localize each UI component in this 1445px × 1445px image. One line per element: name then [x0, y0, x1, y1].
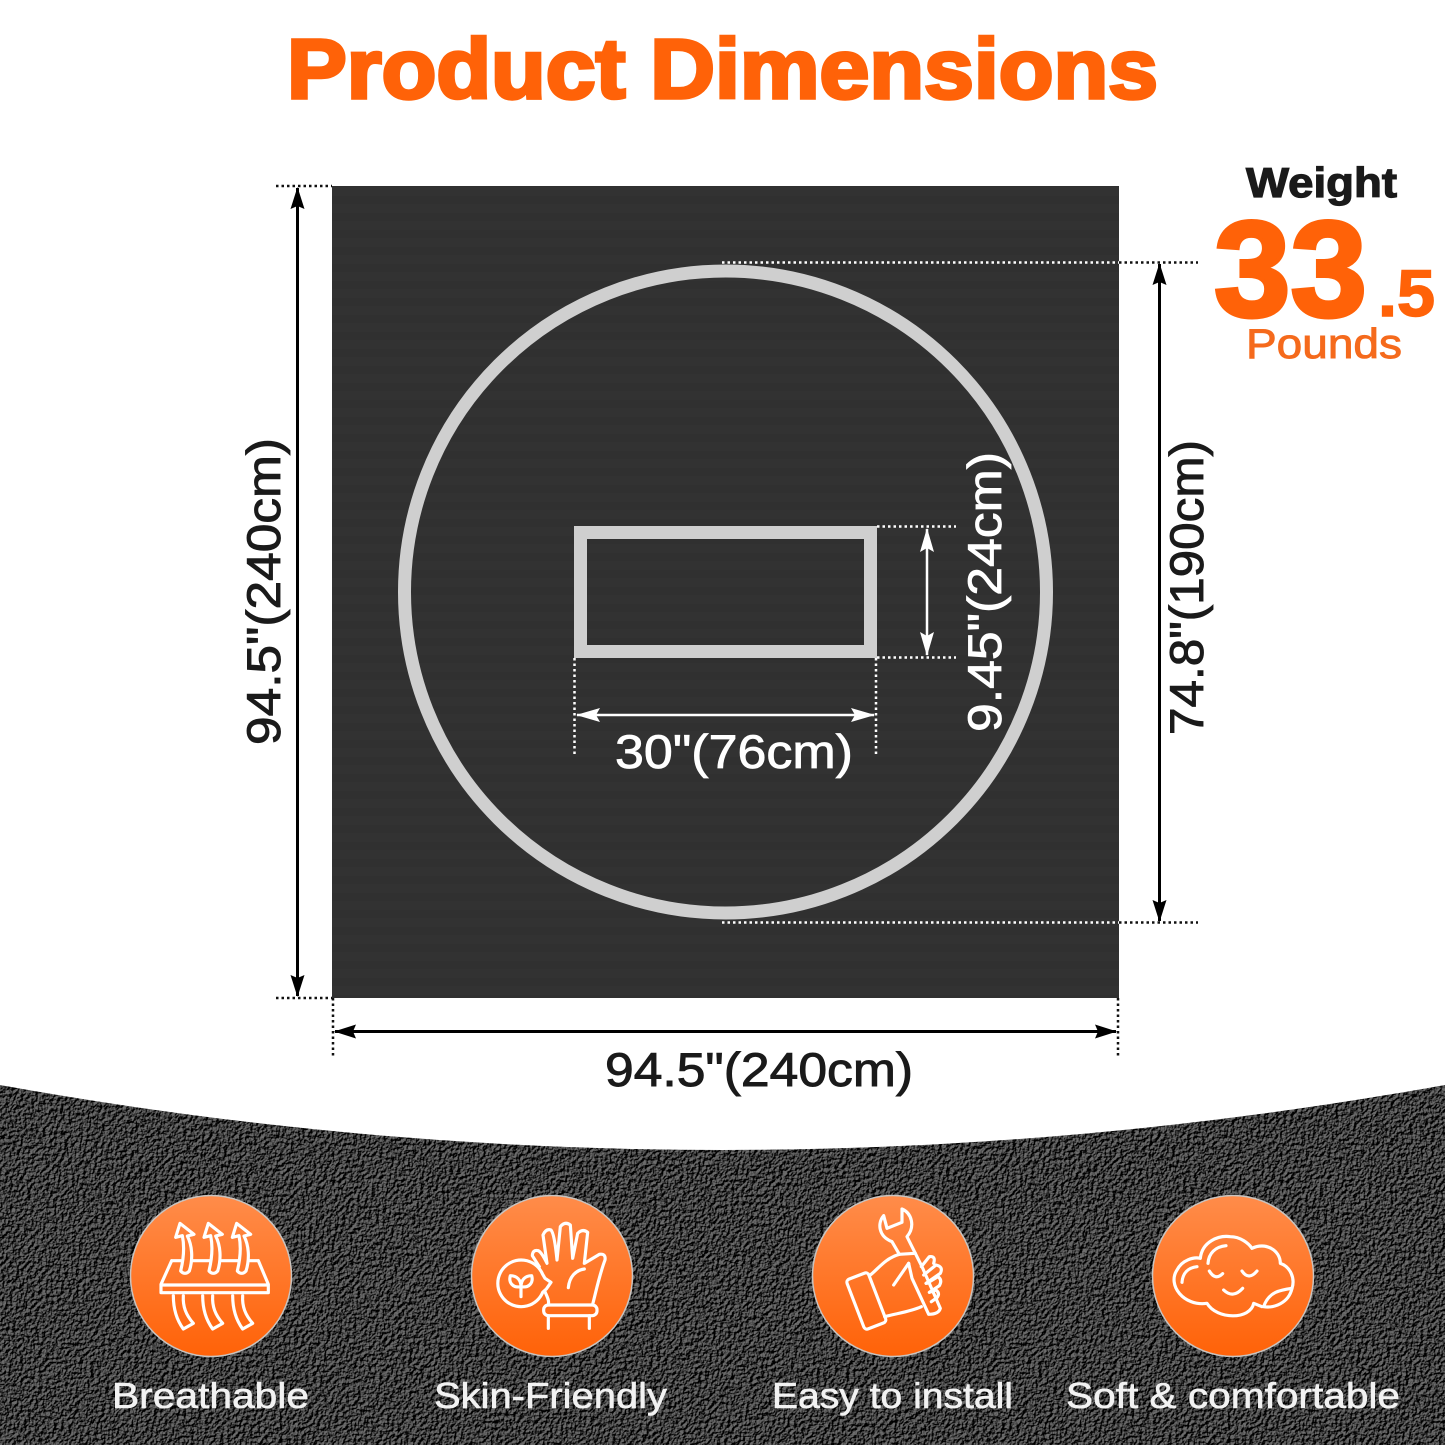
- label: soft and comfortable: Soft & comfortable: [1066, 1375, 1400, 1416]
- panel: leather feature band: [0, 1080, 1445, 1445]
- dimension: rectangle height: 9.45"(24cm): [958, 452, 1011, 732]
- label: breathable: Breathable: [112, 1375, 309, 1416]
- title: Product Dimensions: [287, 22, 1158, 116]
- feature: breathable: [112, 1196, 309, 1416]
- large circle marking: [404, 271, 1046, 913]
- dimension: rectangle width: 30"(76cm): [615, 725, 853, 778]
- panel: mat diagram: [332, 186, 1119, 998]
- dimension: mat width: [333, 998, 1118, 1096]
- feature: easy to install: [772, 1196, 1013, 1416]
- weight value: 33: [1214, 193, 1367, 345]
- dimension: mat height: [237, 186, 332, 998]
- dimension: circle diameter: 74.8"(190cm): [1160, 440, 1213, 735]
- label: easy to install: Easy to install: [772, 1375, 1013, 1416]
- label: skin-friendly: Skin-Friendly: [434, 1375, 667, 1416]
- icon: glove with leaf: [498, 1223, 605, 1328]
- weight callout: [1214, 159, 1435, 367]
- dimension: rectangle width: [574, 658, 876, 778]
- weight decimal: .5: [1378, 256, 1435, 330]
- icon: smiling cloud: [1174, 1236, 1293, 1316]
- feature: skin-friendly: [434, 1196, 667, 1416]
- mat surface: [332, 186, 1119, 998]
- dimension: mat width: 94.5"(240cm): [605, 1043, 913, 1096]
- weight label: Weight: [1246, 159, 1397, 206]
- dimension: rectangle height: [877, 452, 1011, 732]
- icon: breathable fabric: [161, 1223, 268, 1329]
- rectangle marking: [580, 532, 870, 652]
- weight unit: Pounds: [1246, 320, 1402, 367]
- icon: hand holding wrench: [846, 1209, 941, 1330]
- dimension: mat height: 94.5"(240cm): [237, 438, 290, 745]
- feature: soft and comfortable: [1066, 1196, 1400, 1416]
- leather texture: [0, 1080, 1445, 1445]
